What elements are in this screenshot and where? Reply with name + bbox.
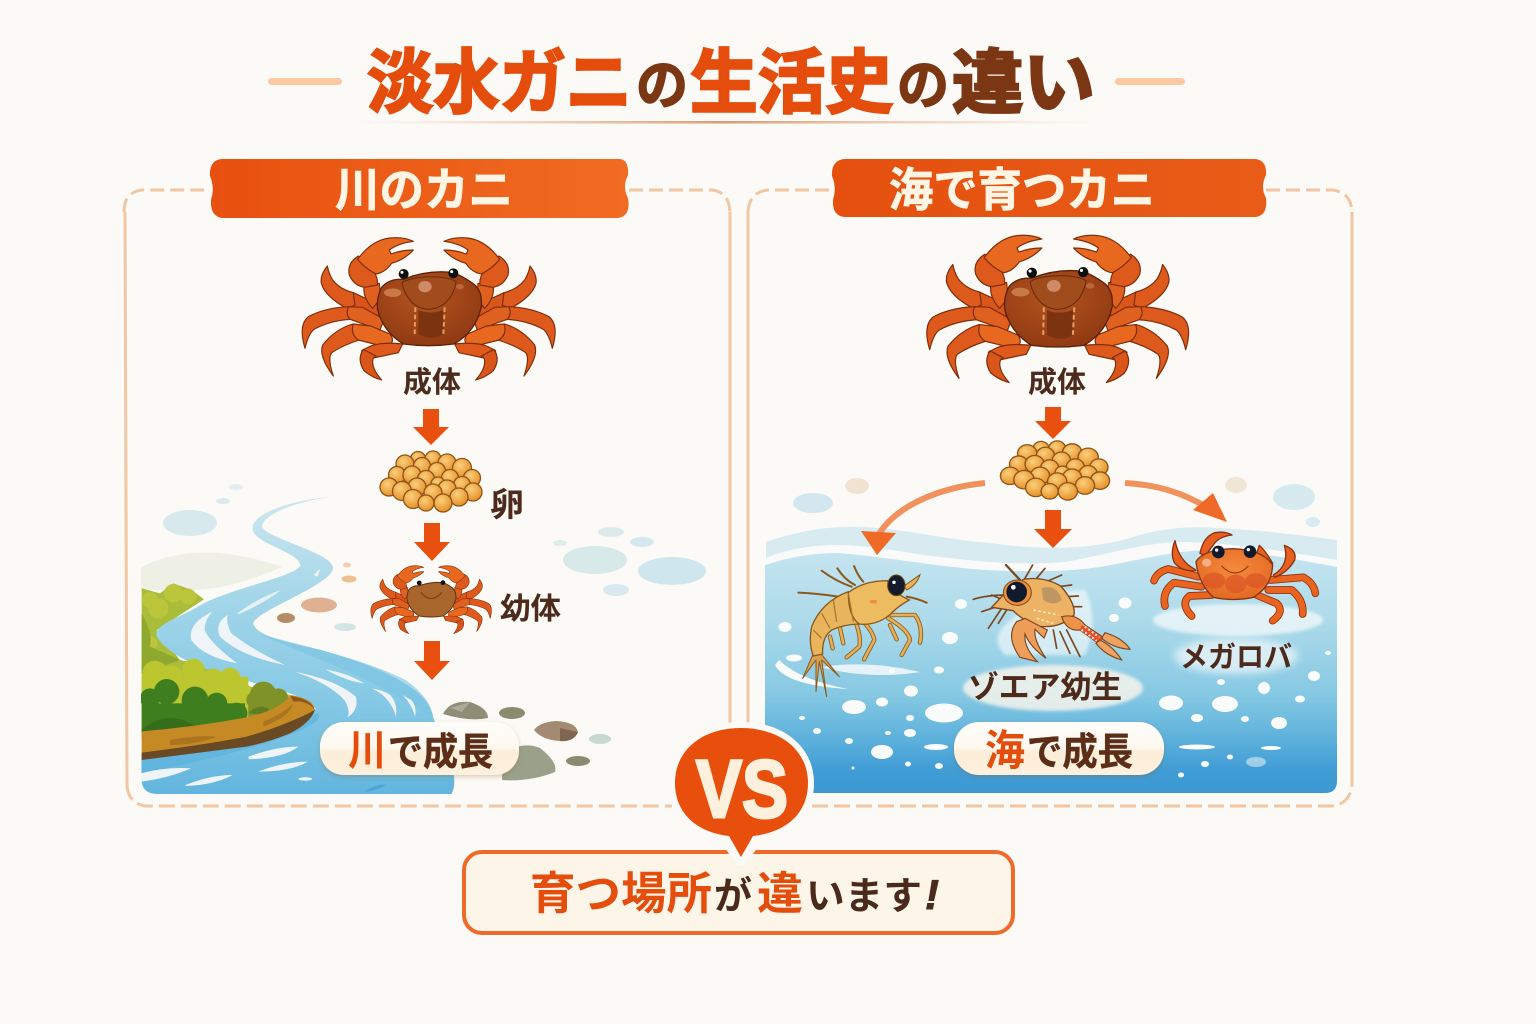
panel: sea crab <box>748 190 1352 806</box>
scene: sea water <box>765 477 1337 793</box>
VS badge: VS <box>696 744 788 835</box>
heading: river crab <box>210 159 629 218</box>
label pill: river growth: 川 <box>348 727 386 774</box>
heading: sea crab: 海で育つカニ <box>889 164 1155 216</box>
label: adult (river): 成体 <box>403 366 461 399</box>
bushes and river bank <box>140 659 315 760</box>
callout box: 違 <box>757 868 803 919</box>
panel: river crab <box>124 190 730 806</box>
title: 淡水ガニ <box>367 44 632 122</box>
icon: shrimp larva <box>798 566 927 697</box>
heading: river crab: 川のカニ <box>335 164 513 216</box>
icon: eggs (sea) <box>1000 441 1110 500</box>
river stones <box>443 702 611 780</box>
label pill: sea growth: で成長 <box>1027 732 1133 774</box>
icon: megalopa <box>1154 532 1315 621</box>
label: egg: 卵 <box>490 486 524 523</box>
callout box: います <box>806 876 922 918</box>
label pill: river growth <box>320 722 519 775</box>
panel frame: river <box>124 190 730 806</box>
icon: adult crab (sea) <box>927 235 1189 383</box>
arrow: curved egg to megalopa <box>1125 483 1227 522</box>
label: juvenile: 幼体 <box>500 593 561 626</box>
title: の <box>897 56 949 116</box>
VS badge <box>674 728 808 860</box>
label: megalopa: メガロバ <box>1180 641 1292 674</box>
label pill: sea growth: 海 <box>985 727 1025 774</box>
callout box <box>464 852 1013 933</box>
callout box: 育つ場所 <box>530 868 712 919</box>
title <box>268 44 1185 124</box>
title: 違い <box>952 44 1095 122</box>
arrow: juvenile to river growth <box>414 641 450 680</box>
callout box: ! <box>925 871 939 918</box>
callout box: が <box>714 876 752 918</box>
icon: zoea larva <box>973 565 1130 662</box>
title: の <box>636 56 688 116</box>
panel frame: sea <box>748 190 1352 806</box>
white bubbles <box>775 590 1331 778</box>
label pill: river growth: で成長 <box>388 732 493 774</box>
arrow: adult to egg (sea) <box>1035 407 1071 439</box>
label: zoea: ゾエア幼生 <box>968 670 1122 705</box>
arrow: egg down to zoea <box>1034 510 1072 548</box>
arrow: adult to egg (river) <box>413 409 449 445</box>
heading: sea crab <box>832 159 1266 217</box>
trees backdrop <box>142 583 290 740</box>
label pill: sea growth <box>954 722 1164 775</box>
label: adult (sea): 成体 <box>1028 366 1086 399</box>
scene: river landscape <box>140 484 706 794</box>
arrow: curved egg to shrimp larva <box>861 483 985 555</box>
icon: juvenile crab <box>371 566 491 634</box>
icon: eggs (river) <box>380 451 482 512</box>
river scene in zoomed coordinates <box>141 497 454 794</box>
arrow: egg to juvenile <box>414 523 450 561</box>
icon: adult crab (river) <box>302 238 555 380</box>
title: 生活史 <box>690 44 893 122</box>
